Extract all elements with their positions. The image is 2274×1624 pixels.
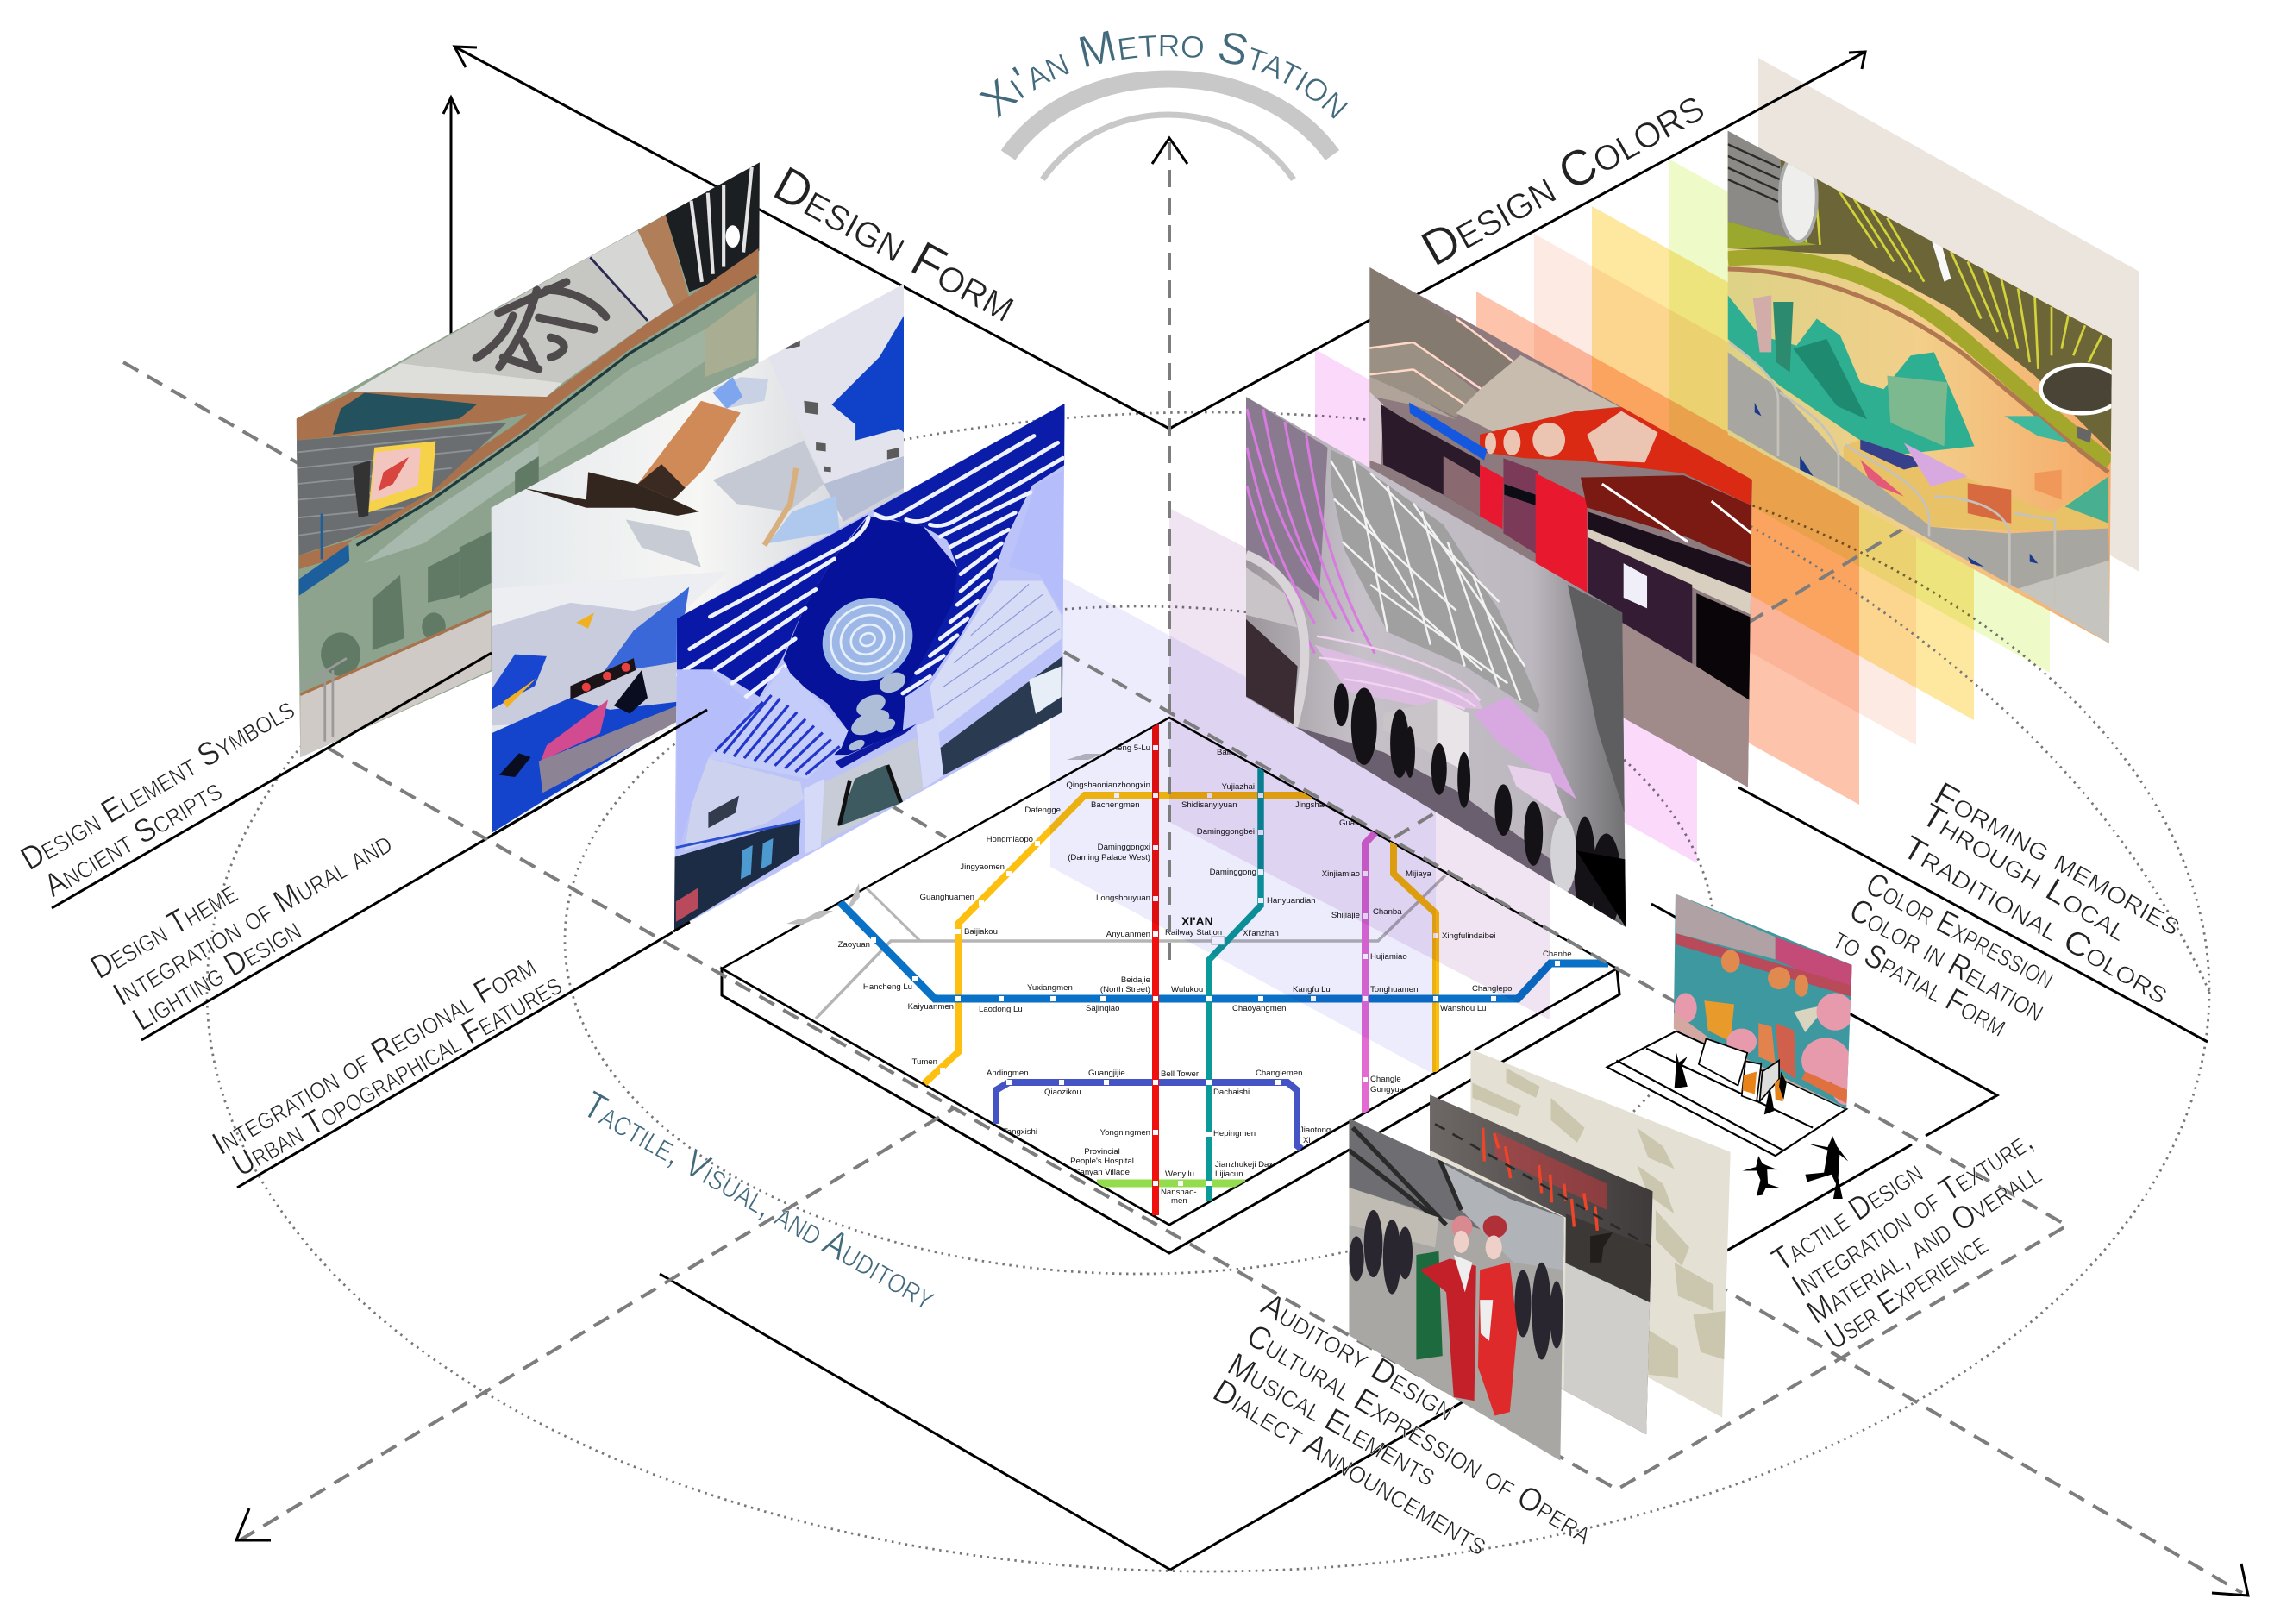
label: Design element symbols: Design Element Symbols [15,690,300,878]
floor plan and mural display [1607,892,1862,1199]
metro map lines and stations: men [1171,1196,1187,1206]
metro map lines and stations: (Daming Palace West) [1068,853,1150,862]
lavender plane over map [1050,571,1436,1075]
label: Auditory design: Cultural Expression of Opera [1240,1318,1599,1552]
metro map lines and stations: Mijiaya [1406,869,1432,879]
metro map lines and stations: Hancheng Lu [863,982,912,992]
metro map lines and stations: Jingshang [1295,800,1333,810]
label: Design theme: Lighting Design [127,911,307,1038]
metro map lines and stations: Zaoyuan [838,940,870,950]
photo: bird mural in blue and white [487,278,911,837]
metro map lines and stations: Daminggongxi [1098,843,1150,852]
metro map lines and stations: Chanba [1373,907,1402,917]
label: Tactile, Visual, and Auditory: Tactile, Visual, and Auditory [576,1083,943,1319]
photo: mural with seal script character [293,155,768,765]
metro map lines and stations: Shijiajie [1331,911,1360,920]
metro map lines and stations: Tumen [911,1057,937,1067]
label: Tactile design: Material, and Overall [1801,1156,2048,1332]
dotted inner ellipse [565,606,1715,1274]
metro map lines and stations: Guanghuamen [920,893,974,902]
metro map lines and stations: Kangfu Lu [1293,985,1331,994]
heading: Design Form: Design Form [765,155,1026,333]
label: Design theme: Integration of Mural and [107,825,398,1013]
metro map lines and stations: Wenyilu [1165,1169,1194,1179]
metro map lines and stations: Wanshou Lu [1440,1004,1487,1013]
metro map lines and stations: Qingshaonianzhongxin [1066,781,1150,790]
metro map lines and stations: Baihua [1217,748,1243,757]
label: Tactile design: Tactile Design [1766,1154,1929,1279]
label: Auditory design: Auditory Design [1255,1287,1462,1428]
metro map lines and stations: Sajinqiao [1086,1004,1119,1013]
metro map lines and stations: Guangtaimen [1339,818,1389,828]
label: Integration of regional form: Urban Topographical Features [226,966,567,1184]
photo: purple curved ceiling hall [1242,387,1628,932]
metro map lines and stations: Shidisanyiyuan [1181,800,1237,810]
metro map lines and stations: Anyuanmen [1106,930,1150,939]
metro map lines and stations: Guangjijie [1088,1069,1125,1078]
metro map lines and stations: Yuxiangmen [1027,983,1073,993]
label: Color expression: to Spatial Form [1827,920,2014,1044]
metro map lines and stations: Lijiacun [1215,1169,1243,1179]
overlay lines along photo bottoms [52,653,707,931]
metro map lines and stations: Railway Station [1165,928,1222,937]
metro map lines and stations: Chanhe [1543,950,1572,959]
label: Auditory design: Dialect Announcements [1206,1373,1494,1563]
label: Forming memories: Traditional Colors [1895,829,2176,1012]
metro map lines and stations: Xi [1303,1136,1311,1145]
photo: blue ceiling station hall [671,397,1070,936]
metro map lines and stations: Daminggong [1210,868,1256,877]
label: Design theme: Design Theme [85,874,243,987]
label: Color expression: Color Expression [1860,866,2061,996]
heading: Design Colors: Design Colors [1413,77,1713,277]
label: Tactile design: User Experience [1819,1226,1994,1358]
label: Tactile design: Integration of Texture, [1786,1122,2039,1305]
metro map lines and stations: Beidajie [1121,975,1150,985]
exhibit panels [1699,1038,1779,1101]
metro map lines and stations: Xingfulindaibei [1442,931,1495,941]
violet plane over map [1169,508,1550,1020]
platform outline [1607,1031,1846,1156]
metro map lines and stations: Hanyuandian [1267,896,1316,906]
thin gray arc [1043,115,1294,179]
metro map lines and stations: (North Street) [1100,985,1150,994]
title: Xi'an Metro Station arc text: Xi'an Metro Station [979,31,1349,119]
metro map lines and stations: Yucheng 5-Lu [1099,743,1150,753]
metro map lines and stations: Tonghuamen [1370,985,1418,994]
color plane: beige [1758,58,2139,572]
title: Xi'an Metro Station arc text [979,31,1349,181]
metro map lines and stations: Bell Tower [1161,1069,1200,1079]
dotted outer ellipse [207,412,2209,1571]
photo: dark LED display [1427,1090,1656,1439]
metro map lines and stations: XI'AN [1181,914,1213,928]
metro map lines and stations: Xi'anzhan [1243,929,1279,938]
label: Forming memories: Through Local [1914,797,2134,949]
metro map lines and stations: Provincial [1084,1147,1120,1157]
label: Integration of regional form: Integration of Regional Form [207,948,542,1163]
thick gray arc [1008,79,1332,155]
label: Tactile design [1766,1122,2048,1358]
metro map lines and stations: Changle [1370,1075,1401,1084]
color plane: yellow [1592,206,1974,720]
gray ghost marks near map edge [786,754,1102,925]
metro map lines and stations: Chaoyangmen [1232,1004,1286,1013]
metro map lines and stations: Daminggongbei [1197,827,1255,837]
metro map lines and stations: Yujiazhai [1222,782,1255,792]
color plane: pink [1315,349,1697,863]
metro map lines and stations: Dachaishi [1213,1088,1250,1097]
arrowheads on dashed axes [236,138,2248,1596]
metro map lines and stations: Baijiakou [964,927,998,937]
metro map lines and stations: Hepingmen [1213,1129,1256,1138]
metro map lines and stations: Xinjiamiao [1322,869,1360,879]
dotted ellipse segments over planes [1751,526,2209,992]
photo: beige text wall [1469,1045,1734,1420]
metro map lines and stations: Hongmiaopo [987,835,1033,844]
color plane: light green [1669,159,2050,673]
label: Design element symbols: Ancient Scripts [38,772,228,905]
board and metro map [722,718,1619,1253]
metro map lines and stations: Sanyan Village [1074,1168,1130,1177]
metro map lines and stations: Wulukou [1171,985,1203,994]
seal script character [476,282,606,369]
color plane: peach [1534,234,1916,745]
metro map lines and stations [816,718,1608,1215]
metro map lines and stations: Dafengge [1024,806,1061,815]
metro map lines and stations: Changlemen [1256,1069,1302,1078]
color plane: orange [1476,292,1859,805]
metro map lines and stations: Yongningmen [1100,1128,1150,1138]
metro map lines and stations: Andingmen [987,1069,1029,1078]
photo: mural with green arch [1723,128,2122,648]
label: Auditory design: Musical Elements [1222,1346,1443,1494]
metro map lines and stations: Jianzhukeji Daxue [1215,1160,1282,1169]
photo: opera performers [1345,1113,1569,1468]
label: Design theme [85,825,398,1038]
label: Forming memories [1895,775,2188,1012]
metro map lines and stations: Jingyaomen [960,862,1005,872]
metro map lines and stations: Tangxishi [1003,1127,1037,1137]
metro map lines and stations: Jiaotong [1300,1126,1331,1135]
metro map lines and stations: Laodong Lu [979,1005,1023,1014]
photo: red station with hexagon ceiling [1362,259,1757,795]
photo: peony mural [1670,892,1862,1113]
label: Color expression: Color in Relation [1844,892,2051,1029]
metro map lines and stations: Hujiamiao [1370,952,1407,962]
metro map lines and stations: Longshouyuan [1096,894,1150,903]
metro map lines and stations: Bachengmen [1091,800,1140,810]
metro map lines and stations: Qiaozikou [1044,1088,1081,1097]
metro map lines and stations: Kaiyuanmen [908,1002,954,1012]
metro map lines and stations: People's Hospital [1070,1157,1134,1166]
metro map lines and stations: Nanshao- [1161,1188,1197,1197]
metro map lines and stations: Changlepo [1472,984,1512,994]
metro map lines and stations: Gongyuan [1370,1085,1408,1094]
label: Forming memories: Forming memories [1928,775,2188,943]
figures [1675,1052,1848,1199]
